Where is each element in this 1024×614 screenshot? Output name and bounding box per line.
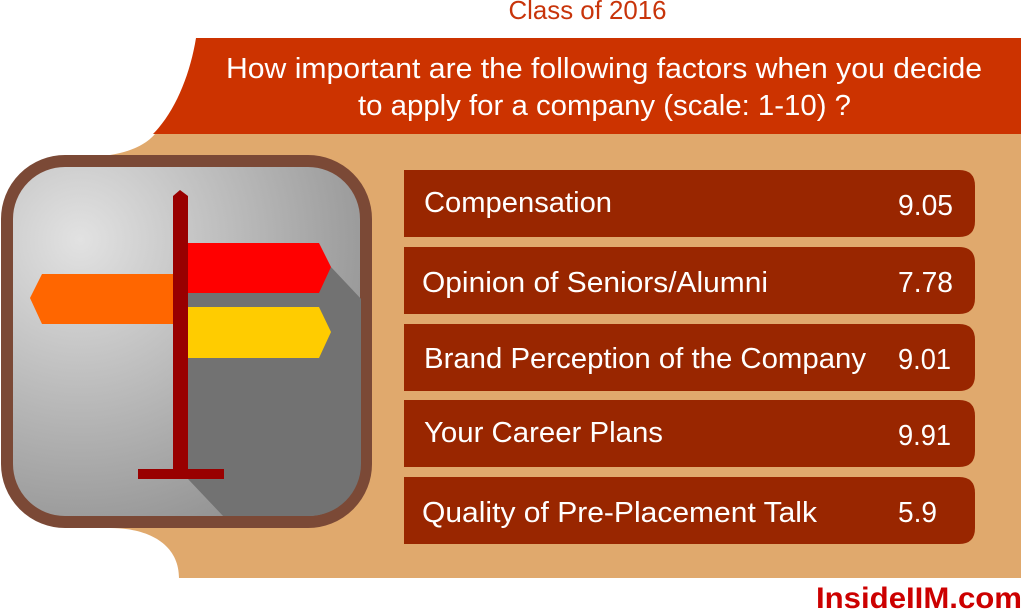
tan background panel [110,130,1021,578]
row: Quality of Pre-Placement Talk: 5.9 [898,497,937,529]
row: Opinion of Seniors/Alumni [404,247,975,314]
row: Your Career Plans [404,400,975,467]
row: Opinion of Seniors/Alumni: 7.78 [898,267,953,299]
header question text [226,53,982,122]
post and base [138,190,224,479]
row: Your Career Plans: 9.91 [898,420,951,452]
long shadow [188,255,362,517]
header question text: to apply for a company (scale: 1-10) ? [358,90,851,122]
row: Quality of Pre-Placement Talk [404,477,975,544]
row: Brand Perception of the Company: 9.01 [898,344,951,376]
header banner [153,38,1021,134]
row: Brand Perception of the Company [404,324,975,391]
yellow sign [188,307,331,358]
header question text: How important are the following factors when you decide [226,53,982,85]
orange sign [30,274,173,324]
row: Brand Perception of the Company: Brand Perception of the Company [424,343,866,375]
icon: signpost [7,161,366,522]
row: Compensation: 9.05 [898,190,953,222]
row: Your Career Plans: Your Career Plans [424,417,663,449]
row: Opinion of Seniors/Alumni: Opinion of Seniors/Alumni [422,267,768,299]
row: Quality of Pre-Placement Talk: Quality of Pre-Placement Talk [422,497,818,529]
red sign [188,243,331,293]
icon frame [7,161,366,522]
row: Compensation: Compensation [424,187,612,219]
row: Compensation [404,170,975,237]
